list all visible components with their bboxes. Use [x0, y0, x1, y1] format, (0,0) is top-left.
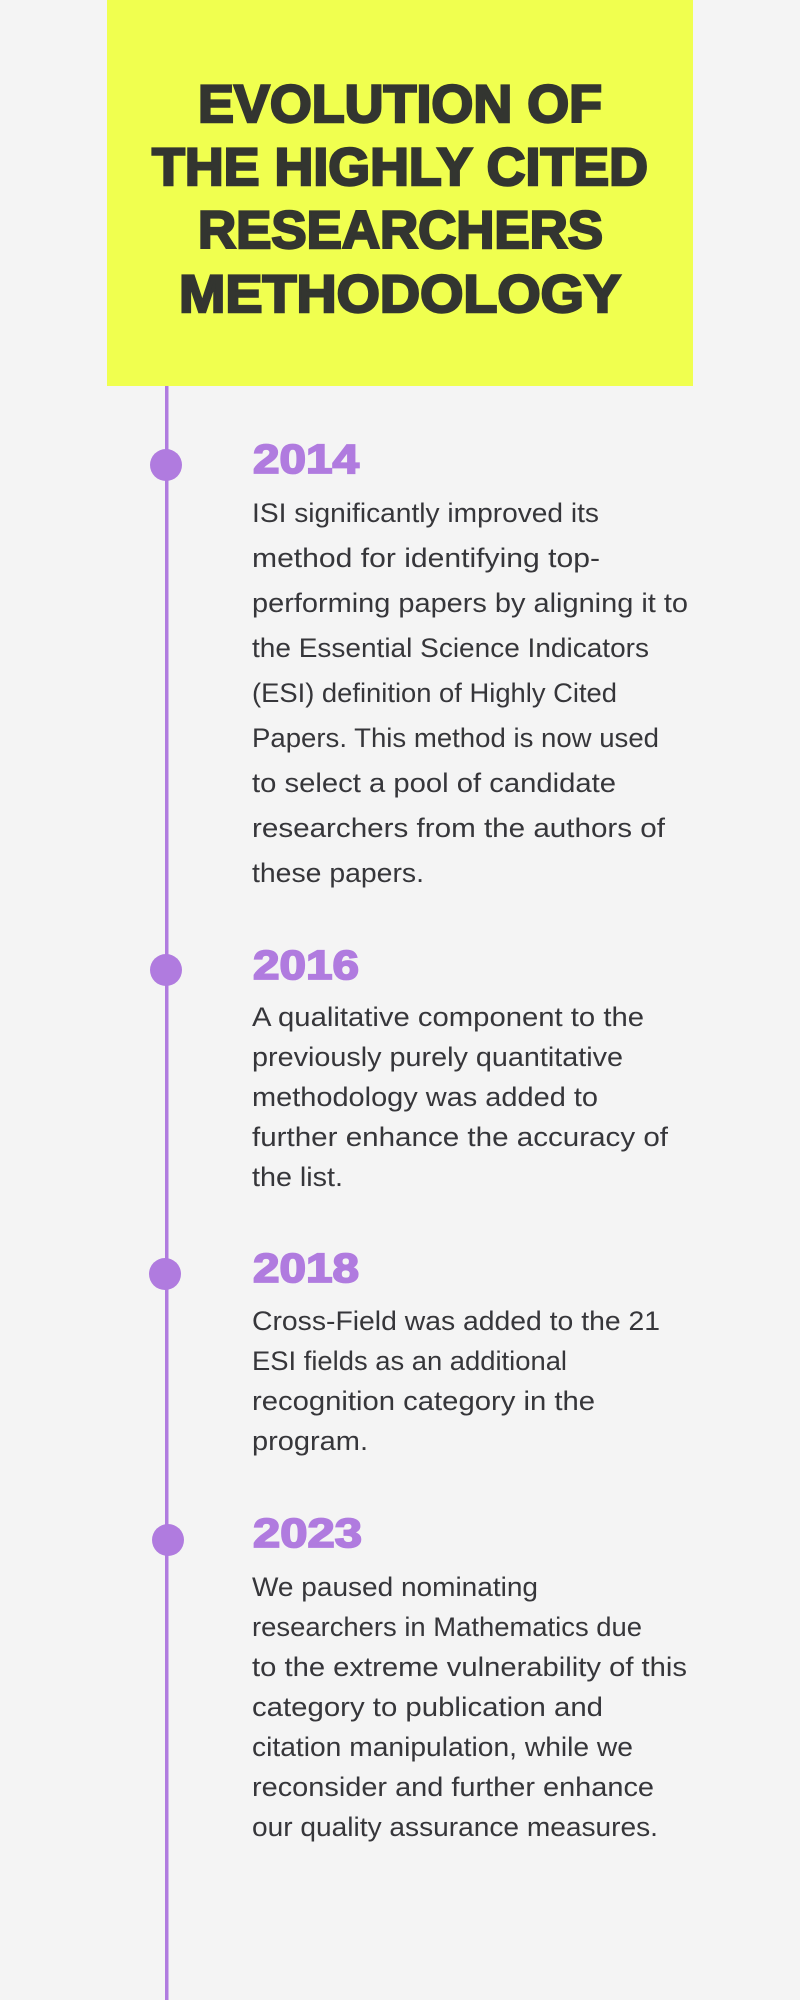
text block: 2023 description	[252, 1572, 687, 1842]
text block: 2016 description: previously purely quantitative	[252, 1042, 623, 1072]
marker: 2018	[149, 1258, 181, 1290]
text block: 2014 description: (ESI) definition of Highly Cited	[252, 678, 617, 708]
text block: 2018 description: Cross-Field was added to the 21	[252, 1306, 660, 1336]
text block: 2014 description: ISI significantly improved its	[252, 498, 599, 528]
text block: 2018 description: ESI fields as an additional	[252, 1346, 567, 1376]
text block: 2018 description	[252, 1306, 660, 1456]
text block: 2023 description: citation manipulation, while we	[252, 1732, 633, 1762]
text block: 2023 description: reconsider and further enhance	[252, 1772, 654, 1802]
text block: 2014 description: to select a pool of candidate	[252, 768, 616, 798]
text block: 2023 description: our quality assurance measures.	[252, 1812, 658, 1842]
marker: 2016	[150, 954, 182, 986]
text block: 2016 description: methodology was added to	[252, 1082, 598, 1112]
year: 2018: 2018	[253, 1245, 359, 1291]
year: 2016: 2016	[253, 942, 359, 988]
text block: 2014 description: the Essential Science Indicators	[252, 633, 649, 663]
title: RESEARCHERS	[198, 201, 603, 260]
text block: 2023 description: to the extreme vulnerability of this	[252, 1652, 687, 1682]
text block: 2014 description: method for identifying top-	[252, 543, 600, 573]
year: 2023: 2023	[253, 1510, 362, 1556]
panel: 2018 entry	[252, 1245, 660, 1456]
text block: 2016 description	[252, 1002, 669, 1192]
text block: 2018 description: program.	[252, 1426, 368, 1456]
text block: 2014 description: Papers. This method is now used	[252, 723, 659, 753]
title: THE HIGHLY CITED	[152, 138, 648, 197]
text block: 2016 description: the list.	[252, 1162, 343, 1192]
panel: 2016 entry	[252, 942, 669, 1192]
text block: 2014 description: researchers from the authors of	[252, 813, 666, 843]
panel: 2014 entry	[252, 436, 688, 888]
text block: 2016 description: A qualitative component to the	[252, 1002, 644, 1032]
text block: 2016 description: further enhance the accuracy of	[252, 1122, 669, 1152]
title: EVOLUTION OF	[198, 75, 602, 134]
title	[152, 75, 648, 324]
timeline line	[165, 386, 168, 2000]
marker: 2014	[150, 449, 182, 481]
text block: 2023 description: researchers in Mathematics due	[252, 1612, 642, 1642]
title: METHODOLOGY	[179, 265, 621, 324]
marker: 2023	[152, 1524, 184, 1556]
text block: 2014 description: performing papers by aligning it to	[252, 588, 688, 618]
panel: 2023 entry	[252, 1510, 687, 1842]
text block: 2023 description: We paused nominating	[252, 1572, 538, 1602]
text block: 2014 description	[252, 498, 688, 888]
panel: title banner	[107, 0, 693, 386]
text block: 2023 description: category to publication and	[252, 1692, 603, 1722]
text block: 2014 description: these papers.	[252, 858, 424, 888]
year: 2014: 2014	[253, 436, 359, 482]
text block: 2018 description: recognition category in the	[252, 1386, 595, 1416]
